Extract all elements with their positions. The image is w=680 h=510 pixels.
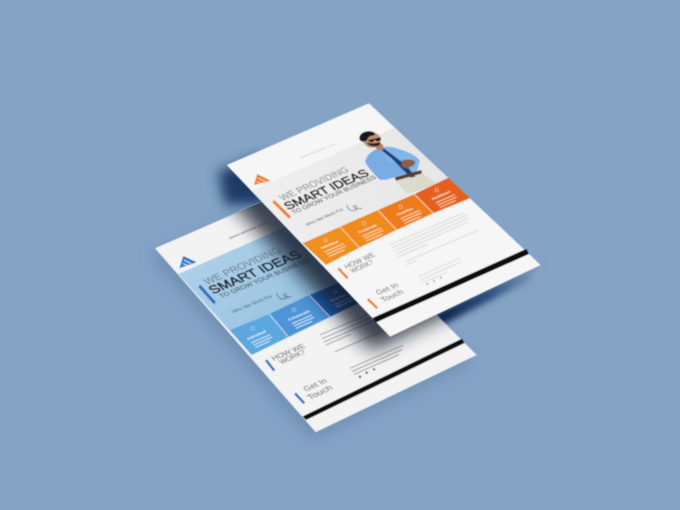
cell: Individual [303,227,359,265]
photo: man in blue shirt [359,131,437,194]
black stripe [372,249,529,322]
panel: orange flyer [227,103,541,337]
how we work heading: HOW WE [342,251,377,270]
cell: Corporate: Corporate [287,310,311,321]
get in touch heading: Get In [301,376,330,393]
website: www.website.com [300,142,337,159]
band dividers [269,295,330,337]
sunglasses [368,137,381,142]
headline: WE PROVIDING [277,166,352,203]
get in touch heading: Touch [379,288,406,304]
panel: blue flyer [155,183,477,432]
headline: SMART IDEAS [205,248,305,296]
who we work for [305,205,362,227]
how we work heading [266,342,308,371]
scene: two flyers on blue background [155,102,541,438]
who we work for [231,293,292,315]
neck [373,144,384,151]
cell: Healthcare: Healthcare [431,190,452,201]
accent bar [199,286,215,303]
beard [367,142,381,146]
headline: TO GROW YOUR BUSINESS [291,175,378,216]
body text lines [390,213,478,265]
hands [402,159,415,169]
how we work heading: WORK? [348,258,376,275]
how we work heading [338,251,377,278]
band dividers [340,194,433,248]
headline: WE PROVIDING [201,245,284,287]
trousers [395,173,437,194]
get in touch heading: Touch [305,383,335,401]
sheet [227,103,541,337]
headline: TO GROW YOUR BUSINESS [218,258,311,300]
cell: Individual: Individual [320,240,339,250]
face [363,132,381,148]
how we work heading: WORK? [277,348,308,366]
service band [303,178,470,265]
who we work for: Who We Work For [231,294,275,315]
shadow under blue flyer [150,195,472,440]
headline: SMART IDEAS [281,167,372,212]
hero background [178,207,400,355]
who we work for: Who We Work For [305,207,345,227]
contact details [350,345,403,378]
shadow under orange flyer, right side [400,262,540,345]
cell: Individual: Individual [246,330,267,341]
logo [179,256,197,268]
accent bar [273,201,290,218]
cast shadow of orange flyer on blue flyer [226,202,450,362]
website: www.website.com [227,220,269,240]
shadow under orange flyer, left side [218,155,285,205]
cell: Charities: Charities [396,207,414,216]
black stripe [302,339,464,420]
hair [359,131,375,142]
body text lines [320,309,395,352]
sheet [155,183,477,432]
cell: Corporate: Corporate [357,224,378,234]
get in touch heading [368,281,406,308]
cell: Corporate [340,210,397,248]
service band [230,278,370,355]
left sleeve [365,148,410,180]
torso shirt [373,147,420,178]
get in touch heading: Get In [374,281,401,296]
logo [254,174,271,185]
how we work heading: HOW WE [269,342,308,362]
cell: Charities: Charities [330,293,348,302]
get in touch heading [295,376,335,403]
contact details [418,258,462,285]
cell: Charities [378,194,433,230]
tie [380,148,415,178]
cell: Healthcare [414,178,470,213]
belt [395,170,422,181]
hero background [251,128,448,243]
